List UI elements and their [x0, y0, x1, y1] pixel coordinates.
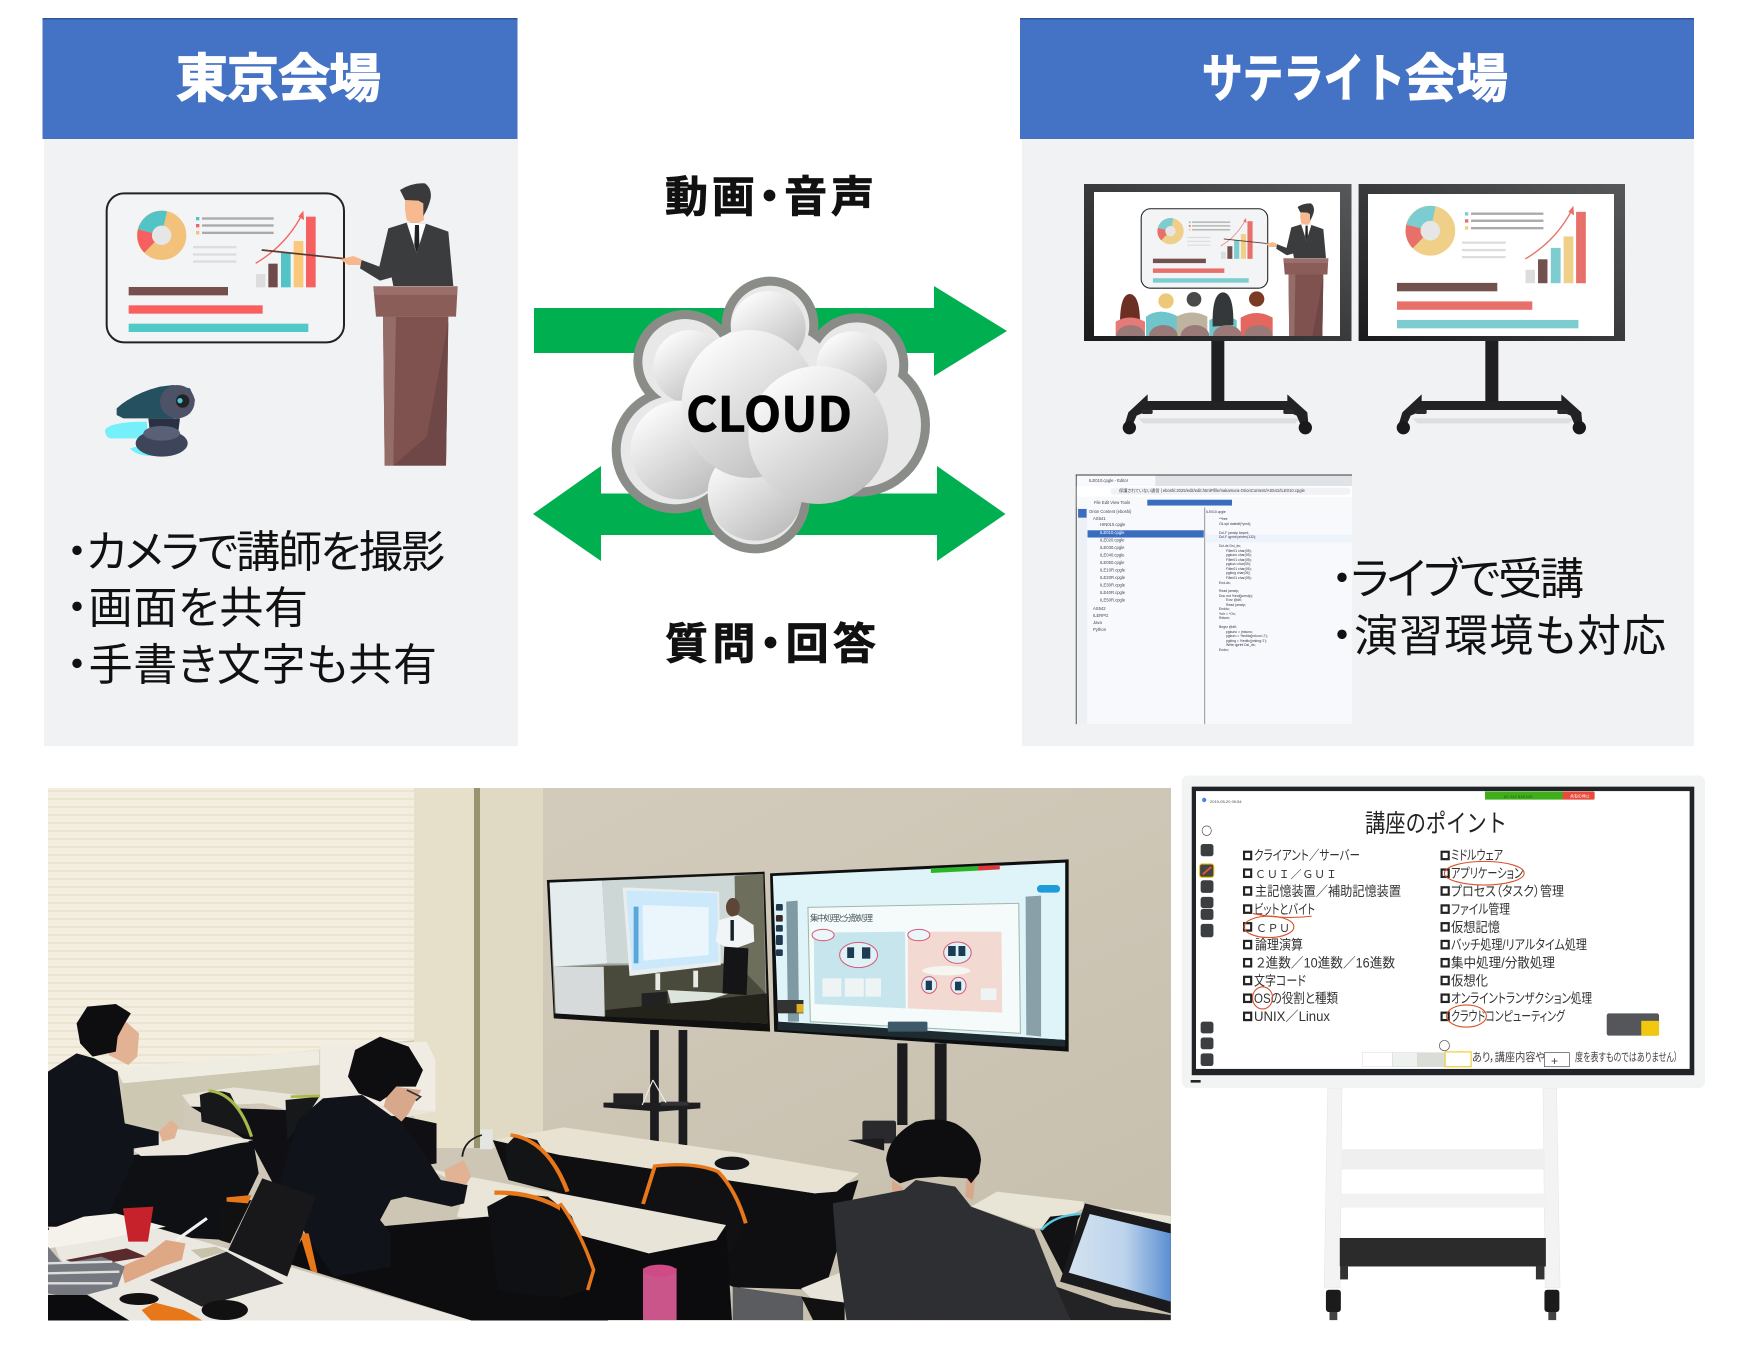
arrow: two-way questions and answers — [533, 466, 1006, 561]
list: course topics, right column — [1451, 848, 1592, 1024]
footnote on whiteboard — [1472, 1050, 1678, 1064]
text: Tokyo venue points: ・カメラで講師を撮影 — [66, 528, 445, 577]
list: course topics, right column: 仮想記憶 — [1451, 920, 1500, 935]
list: course topics, left column — [1254, 848, 1401, 1024]
text: satellite venue points — [1331, 555, 1666, 661]
list: course topics, right column: バッチ処理/リアルタイム処理 — [1451, 938, 1587, 952]
screenshot: online editor: Read jumstp; — [1219, 589, 1239, 593]
screenshot: online editor: Filler01 char(05); — [1226, 558, 1252, 562]
right side of classroom: desks and third student — [493, 1120, 1171, 1320]
list: course topics, left column: 主記憶装置／補助記憶装置 — [1255, 884, 1401, 899]
screenshot: online editor: ILE010.cpgle — [1100, 530, 1125, 535]
screenshot: online editor: End-ds; — [1219, 581, 1231, 585]
screenshot: online editor: Enddo; — [1219, 607, 1230, 611]
heading: satellite venue: サテライト — [1202, 51, 1405, 109]
label: CLOUD: CLOUD — [686, 376, 852, 446]
list: course topics, left column: クライアント／サーバー — [1254, 848, 1360, 863]
list: course topics, left column: UNIX／Linux — [1254, 1009, 1330, 1024]
left side of classroom: desks and two students — [48, 1004, 608, 1321]
text: Tokyo venue points — [66, 528, 445, 690]
list: course topics, left column: ＣＵＩ／ＧＵＩ — [1255, 868, 1337, 881]
screenshot: online editor: Dcl-ds Dsl_ds; — [1219, 544, 1241, 548]
classroom wall and window blinds — [48, 788, 1171, 1321]
screenshot: online editor: ILERPG — [1093, 613, 1108, 618]
screenshot: online editor: pgkuru char(05); — [1226, 562, 1251, 566]
list: course topics, right column: プロセス（タスク）管理 — [1451, 884, 1564, 899]
screenshot: online editor: Read jumstp; — [1226, 603, 1246, 607]
screenshot: online editor: Ctl-opt datedit(*ymd); — [1219, 522, 1251, 526]
screenshot: online editor: Dou not %eof(jumstp); — [1219, 594, 1253, 598]
heading: satellite venue — [1020, 18, 1694, 139]
screenshot: online editor: AS542 — [1093, 606, 1106, 611]
screenshot: online editor: Filler01 char(05); — [1226, 576, 1252, 580]
text: Tokyo venue points: ・画面を共有 — [66, 584, 308, 633]
screenshot: online editor: ILE20R.cpgle — [1100, 575, 1126, 580]
photo: satellite classroom — [48, 788, 1171, 1321]
heading: Tokyo venue: 東京会場 — [176, 51, 381, 109]
screenshot: online editor: AS541 — [1093, 516, 1106, 521]
screenshot: online editor: ILE030.cpgle — [1100, 545, 1125, 550]
whiteboard status text — [1210, 792, 1590, 1068]
handwritten red annotations — [1244, 861, 1524, 1027]
whiteboard status text: 共有の停止 — [1570, 792, 1590, 798]
presenter at podium — [262, 183, 458, 466]
list: course topics, right column: 集中処理/分散処理 — [1451, 956, 1555, 970]
screenshot: online editor: Python — [1093, 627, 1107, 632]
screenshot: online editor: HIN010.cpgle — [1100, 522, 1126, 527]
list: course topics, left column: 論理演算 — [1255, 936, 1303, 952]
list: course topics, left column: ＣＰＵ — [1256, 923, 1290, 935]
screenshot: online editor: pgking = %editc(jmking:'J'); — [1226, 639, 1267, 643]
screenshot: online editor: Orion Content (eboshi) — [1089, 509, 1132, 514]
screenshot: online editor: ILE020.cpgle — [1100, 538, 1125, 542]
text: satellite venue points: ・演習環境も対応 — [1331, 612, 1666, 661]
title: course points: 講座のポイント — [1365, 810, 1507, 838]
list: course topics, right column: ミドルウェア — [1451, 848, 1503, 863]
screenshot: online editor: Begsr @dtl; — [1219, 625, 1237, 629]
whiteboard status text: ID: 912 818 133 — [1504, 794, 1533, 799]
monitor: lecture video — [1084, 184, 1352, 434]
screenshot: online editor: ILE10R.cpgle — [1100, 568, 1126, 572]
list: course topics, left column: OSの役割と種類 — [1254, 991, 1338, 1006]
whiteboard status text: 2019-05-20 09:54 — [1210, 799, 1242, 804]
arrow: outbound video stream — [534, 286, 1007, 376]
screenshot: online editor: File Edit View Tools — [1094, 500, 1130, 505]
whiteboard frame and screen — [1182, 776, 1705, 1088]
list: course topics, left column: 文字コード — [1254, 974, 1306, 988]
text: Tokyo venue points: ・手書き文字も共有 — [66, 641, 437, 690]
list: course topics, right column: オンライントランザクション処理 — [1451, 991, 1592, 1006]
screenshot: online editor: ILE050.cpgle — [1100, 560, 1125, 565]
list: course topics, right column: ファイル管理 — [1451, 902, 1510, 917]
screenshot: online editor: Filler01 char(05); — [1226, 567, 1252, 571]
list: course topics, right column: 仮想化 — [1451, 974, 1488, 988]
text: satellite venue points: ・ライブで受講 — [1331, 555, 1584, 604]
screenshot: online editor: Dcl-F qprint printer(132); — [1219, 535, 1256, 539]
screenshot: online editor: pgking char(05); — [1226, 571, 1251, 575]
presentation board — [107, 193, 344, 342]
screenshot: online editor — [1076, 475, 1352, 724]
footnote on whiteboard: あり，講座内容や — [1472, 1050, 1545, 1064]
panel: satellite venue — [1020, 18, 1694, 746]
screenshot: online editor: ILE010.cpgle - Editor — [1089, 478, 1129, 483]
label: video and audio: 動画・音声 — [665, 174, 874, 222]
list: course topics, right column: アプリケーション — [1451, 866, 1523, 881]
list: course topics, right column: クラウドコンピューティング — [1451, 1009, 1565, 1024]
screenshot: online editor: Dcl-F jumstp keyed; — [1219, 531, 1249, 535]
screenshot: online editor: 保護されていない通信 | eboshi:2025/edit/edit.html#/file/nakamura-OrionContent/AS541/ILE010.cpgle — [1119, 487, 1306, 494]
screenshot: online editor: ILE40R.cpgle — [1100, 590, 1126, 595]
display stands and wall shelves — [603, 1030, 947, 1151]
screenshot: online editor: ILE50R.cpgle — [1100, 598, 1126, 602]
screenshot: online editor: ILE040.cpgle — [1100, 552, 1125, 558]
panel: Tokyo venue — [42, 18, 518, 746]
footnote on whiteboard: 度を表すものではありません） — [1575, 1051, 1678, 1064]
screenshot: online editor: pgkuno = jmkuno; — [1226, 630, 1253, 634]
screenshot: online editor: *Inlr = *On; — [1219, 612, 1236, 616]
label: questions and answers: 質問・回答 — [665, 621, 876, 669]
screenshot: online editor: Endsr; — [1219, 648, 1229, 652]
icon: cloud — [612, 277, 930, 553]
digital whiteboard — [1182, 776, 1705, 1320]
screenshot: online editor: ILE010.cpgle — [1206, 510, 1226, 514]
screenshot: online editor: pgkuru = %editc(jmkuru:'J'); — [1226, 634, 1268, 638]
screenshot: online editor: Filler01 char(05); — [1226, 549, 1252, 553]
whiteboard stand — [1324, 1088, 1560, 1320]
label: on-screen slide title: 集中処理と分散処理 — [810, 913, 873, 923]
whiteboard status text: + — [1551, 1054, 1558, 1068]
screenshot: online editor: Return; — [1219, 616, 1230, 620]
list: course topics, left column: ２進数／10進数／16進数 — [1256, 956, 1395, 970]
wall displays — [547, 859, 1069, 1052]
heading: satellite venue: 会場 — [1405, 51, 1508, 109]
screenshot: online editor: Write qprint Dsl_ds; — [1226, 643, 1256, 647]
screenshot: online editor: Exsr @dtl; — [1226, 598, 1242, 602]
screenshot: online editor: ILE30R.cpgle — [1100, 582, 1126, 588]
monitor: shared slides — [1359, 184, 1625, 434]
list: course topics, left column: ビットとバイト — [1254, 902, 1315, 917]
screenshot: online editor: **free — [1219, 517, 1228, 521]
heading: Tokyo venue — [42, 18, 518, 139]
screenshot: online editor: pgkuno char(05); — [1226, 553, 1252, 557]
icon: webcam — [105, 385, 195, 457]
screenshot: online editor: Java — [1093, 620, 1103, 625]
